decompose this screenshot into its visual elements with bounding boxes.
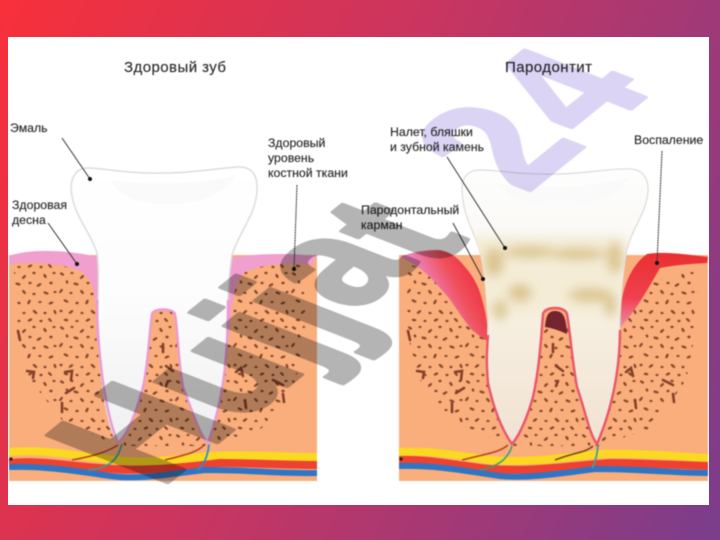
root membrane outline (97, 300, 228, 443)
nerve and blood vessels (399, 445, 708, 477)
inflamed gum, left side (400, 250, 488, 342)
watermark: 24 (369, 27, 694, 208)
porous bone texture (404, 264, 698, 446)
label: inflammation (634, 133, 703, 265)
porous bone texture (14, 262, 306, 446)
inflamed gum, right side (620, 253, 708, 328)
label: enamel: Эмаль (10, 121, 48, 135)
crown highlight (110, 176, 235, 204)
heading: healthy tooth: Здоровый зуб (124, 59, 226, 76)
plaque and tartar (470, 236, 625, 320)
crown highlight (495, 178, 628, 206)
watermark: Hujjat (0, 171, 508, 503)
gum, right side (227, 254, 317, 345)
gum, left side (9, 251, 100, 345)
label: healthy bone level (268, 136, 348, 271)
large bone pores (18, 331, 284, 412)
large bone pores (408, 331, 674, 412)
nerve and blood vessels (9, 444, 317, 477)
diseased tooth (462, 169, 648, 444)
root membrane outline (487, 308, 620, 444)
periodontal pocket (545, 311, 567, 334)
right diagram: periodontitis (399, 169, 708, 481)
label: plaque and tartar (390, 125, 507, 250)
healthy tooth (71, 167, 257, 443)
label: plaque and tartar: и зубной камень (390, 140, 484, 154)
heading: periodontitis: Пародонтит (505, 59, 592, 76)
label: plaque and tartar: Налет, бляшки (390, 125, 473, 139)
bone and tissue block (399, 255, 708, 481)
label: healthy gum (12, 198, 79, 266)
label: enamel (10, 121, 92, 181)
left diagram: healthy tooth (9, 167, 317, 481)
label: healthy gum: десна (12, 213, 46, 227)
label: healthy gum: Здоровая (12, 198, 67, 212)
label: healthy bone level: костной ткани (268, 166, 348, 180)
label: healthy bone level: Здоровый (268, 136, 325, 150)
label: periodontal pocket (361, 203, 485, 281)
label: periodontal pocket: Пародонтальный (361, 203, 459, 217)
label: periodontal pocket: карман (361, 218, 402, 232)
label: inflammation: Воспаление (634, 133, 703, 147)
bone and tissue block (9, 255, 317, 481)
infographic illustration (8, 48, 709, 484)
label: healthy bone level: уровень (268, 151, 314, 165)
